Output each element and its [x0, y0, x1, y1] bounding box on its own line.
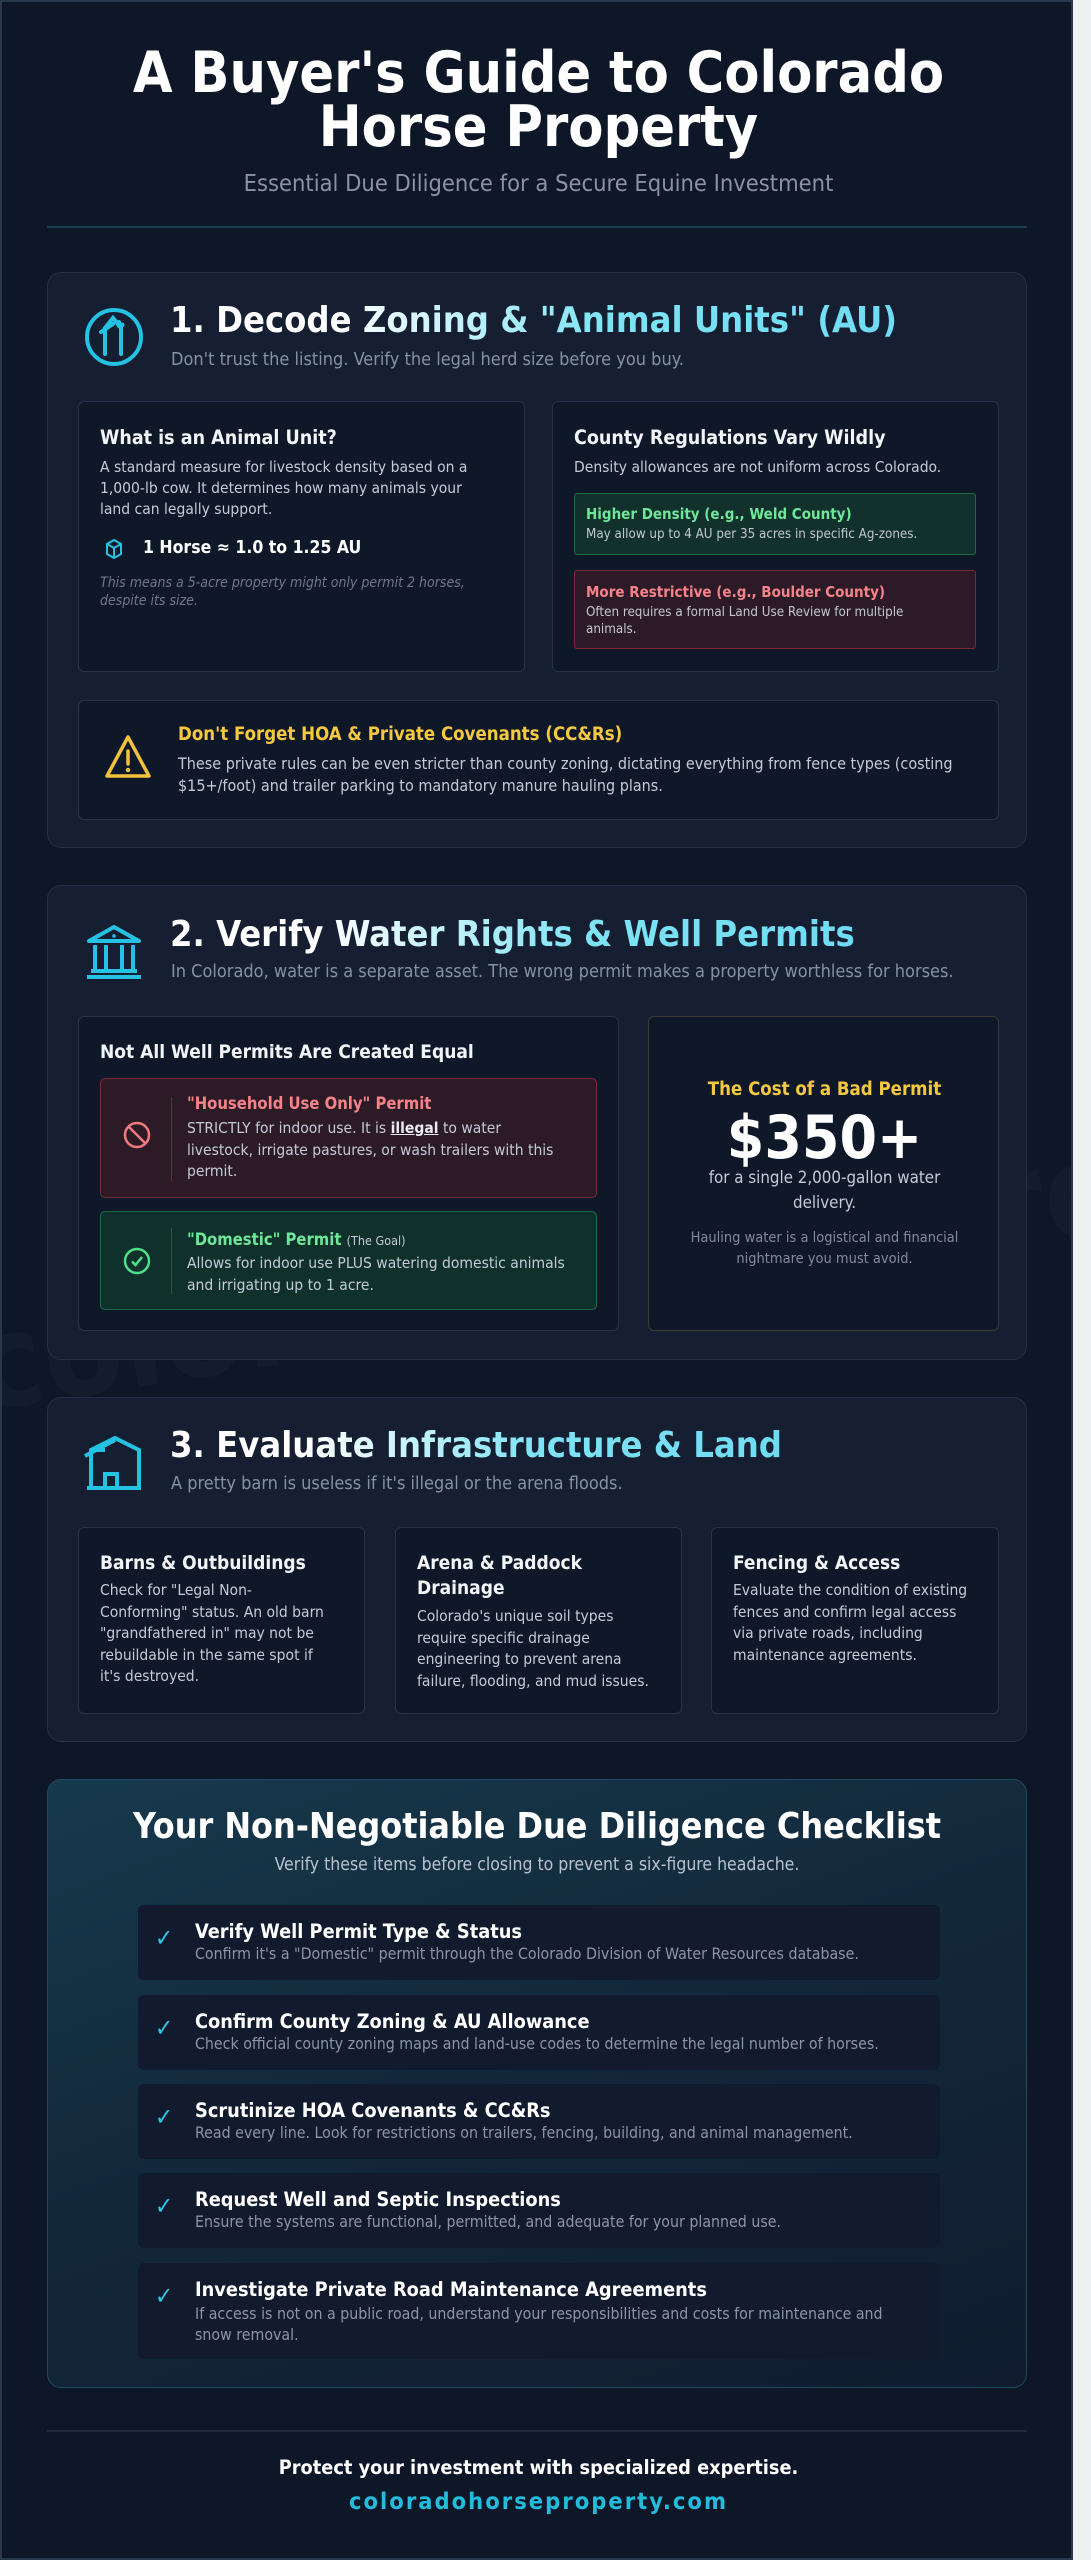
icon: horse circle: [85, 308, 143, 366]
subtitle: Essential Due Diligence for a Secure Equine Investment: [244, 169, 833, 197]
callout: HOA warning: [78, 700, 999, 820]
item 4: Request Well and Septic Inspections: [195, 2188, 561, 2211]
title: A Buyer's Guide to Colorado: [133, 40, 944, 106]
callout: higher density: May allow up to 4 AU per 35 acres in specific Ag-zones.: [586, 527, 917, 542]
item 2: Check official county zoning maps and land-use codes to determine the legal number of horses.: [195, 2034, 879, 2053]
callout: more restrictive: [574, 570, 976, 649]
callout: cost of bad permit: nightmare you must avoid.: [736, 1251, 913, 1267]
callout: domestic permit: Allows for indoor use PLUS watering domestic animals and irrigating up to 1 acre.: [187, 1254, 565, 1294]
panel: arena drainage: [395, 1527, 682, 1714]
heading: 3. Evaluate Infrastructure & Land: [170, 1425, 782, 1466]
callout: cost of bad permit: for a single 2,000-gallon water: [709, 1167, 940, 1187]
subheading: In Colorado, water is a separate asset. The wrong permit makes a property worthless for horses.: [171, 961, 954, 982]
checklist title: Your Non-Negotiable Due Diligence Checklist: [133, 1806, 941, 1847]
panel: fencing: [711, 1527, 999, 1714]
item 2: ✓: [155, 2014, 173, 2042]
item 2: [138, 1995, 940, 2070]
subheading: A pretty barn is useless if it's illegal or the arena floods.: [171, 1473, 623, 1494]
item 5: Investigate Private Road Maintenance Agreements: [195, 2278, 707, 2301]
callout: household use only: "Household Use Only" Permit: [187, 1094, 431, 1113]
panel: barns: Barns & Outbuildings: [100, 1552, 306, 1574]
callout: more restrictive: Often requires a formal Land Use Review for multiple animals.: [586, 605, 903, 637]
callout: household use only: [100, 1078, 597, 1198]
item 1: Confirm it's a "Domestic" permit through the Colorado Division of Water Resources database.: [195, 1944, 859, 1963]
item 4: ✓: [155, 2192, 173, 2220]
item 1: Verify Well Permit Type & Status: [195, 1920, 522, 1943]
panel: animal unit: A standard measure for livestock density based on a 1,000-lb cow. It determines how many animals your land can legally support.: [100, 458, 467, 518]
title: [133, 40, 944, 160]
icon: barn: [84, 1436, 141, 1490]
panel: section 3 infrastructure: [47, 1397, 1027, 1742]
item 5: ✓: [155, 2282, 173, 2310]
icon: check circle: [124, 1248, 150, 1274]
panel: well permits: Not All Well Permits Are Created Equal: [100, 1041, 474, 1063]
icon: warning triangle: [105, 735, 151, 778]
panel: county regulations: [552, 401, 999, 672]
icon: cube: [106, 539, 122, 559]
callout: higher density: Higher Density (e.g., Weld County): [586, 505, 852, 523]
callout: cost of bad permit: delivery.: [793, 1192, 856, 1212]
item 4: Ensure the systems are functional, permitted, and adequate for your planned use.: [195, 2212, 781, 2231]
item 5: [138, 2263, 940, 2359]
footer tagline: Protect your investment with specialized expertise.: [279, 2456, 798, 2479]
item 3: Read every line. Look for restrictions on trailers, fencing, building, and animal management.: [195, 2123, 853, 2142]
icon: landmark: [87, 925, 142, 979]
item 4: [138, 2173, 940, 2248]
callout: cost of bad permit: [648, 1016, 999, 1331]
panel: section 2 water: [47, 885, 1027, 1360]
panel: county regulations: Density allowances are not uniform across Colorado.: [574, 458, 941, 476]
panel: well permits: [78, 1016, 619, 1331]
panel: fencing: Fencing & Access: [733, 1552, 900, 1574]
callout: cost of bad permit: Hauling water is a logistical and financial: [691, 1230, 958, 1246]
heading: 2. Verify Water Rights & Well Permits: [170, 914, 855, 955]
callout: cost of bad permit: The Cost of a Bad Permit: [708, 1079, 941, 1100]
callout: HOA warning: These private rules can be even stricter than county zoning, dictating everything from fence types (costing $15+/foot) and trailer parking to mandatory manure hauling plans.: [178, 754, 953, 795]
panel: barns: [78, 1527, 365, 1714]
item 3: [138, 2084, 940, 2159]
panel: arena drainage: Arena & Paddock Drainage: [417, 1552, 582, 1599]
panel: animal unit: This means a 5-acre property might only permit 2 horses, despite its size.: [100, 575, 465, 609]
callout: household use only: STRICTLY for indoor use. It is illegal to water livestock, irrigate pastures, or wash trailers with this permit.: [187, 1119, 553, 1180]
panel: checklist: [47, 1779, 1027, 2388]
panel: county regulations: County Regulations Vary Wildly: [574, 426, 886, 449]
item 2: Confirm County Zoning & AU Allowance: [195, 2010, 590, 2033]
icon: prohibited: [124, 1122, 150, 1148]
item 1: ✓: [155, 1924, 173, 1952]
checklist subtitle: Verify these items before closing to prevent a six-figure headache.: [275, 1855, 799, 1875]
panel: barns: Check for "Legal Non-Conforming" status. An old barn "grandfathered in" may not be rebuildable in the same spot if it's destroyed.: [100, 1581, 324, 1685]
panel: fencing: Evaluate the condition of existing fences and confirm legal access via private roads, including maintenance agreements.: [733, 1581, 967, 1664]
callout: more restrictive: More Restrictive (e.g., Boulder County): [586, 583, 885, 601]
item 5: If access is not on a public road, understand your responsibilities and costs for maintenance and snow removal.: [195, 2304, 883, 2344]
item 3: Scrutinize HOA Covenants & CC&Rs: [195, 2099, 551, 2122]
panel: animal unit: [78, 401, 525, 672]
item 1: [138, 1905, 940, 1980]
subheading: Don't trust the listing. Verify the legal herd size before you buy.: [171, 349, 684, 370]
heading: 1. Decode Zoning & "Animal Units" (AU): [170, 300, 897, 341]
callout: HOA warning: Don't Forget HOA & Private Covenants (CC&Rs): [178, 724, 622, 745]
callout: cost of bad permit: $350+: [727, 1103, 922, 1173]
panel: arena drainage: Colorado's unique soil types require specific drainage engineering to prevent arena failure, flooding, and mud issues.: [417, 1607, 649, 1690]
panel: section 1 zoning: [47, 272, 1027, 848]
callout: domestic permit: "Domestic" Permit (The Goal): [187, 1230, 405, 1249]
panel: animal unit: What is an Animal Unit?: [100, 426, 337, 449]
item 3: ✓: [155, 2103, 173, 2131]
callout: higher density: [574, 493, 976, 555]
callout: domestic permit: [100, 1211, 597, 1310]
footer url: coloradohorseproperty.com: [349, 2487, 728, 2515]
panel: animal unit: 1 Horse ≈ 1.0 to 1.25 AU: [143, 538, 361, 558]
title: Horse Property: [319, 94, 758, 160]
